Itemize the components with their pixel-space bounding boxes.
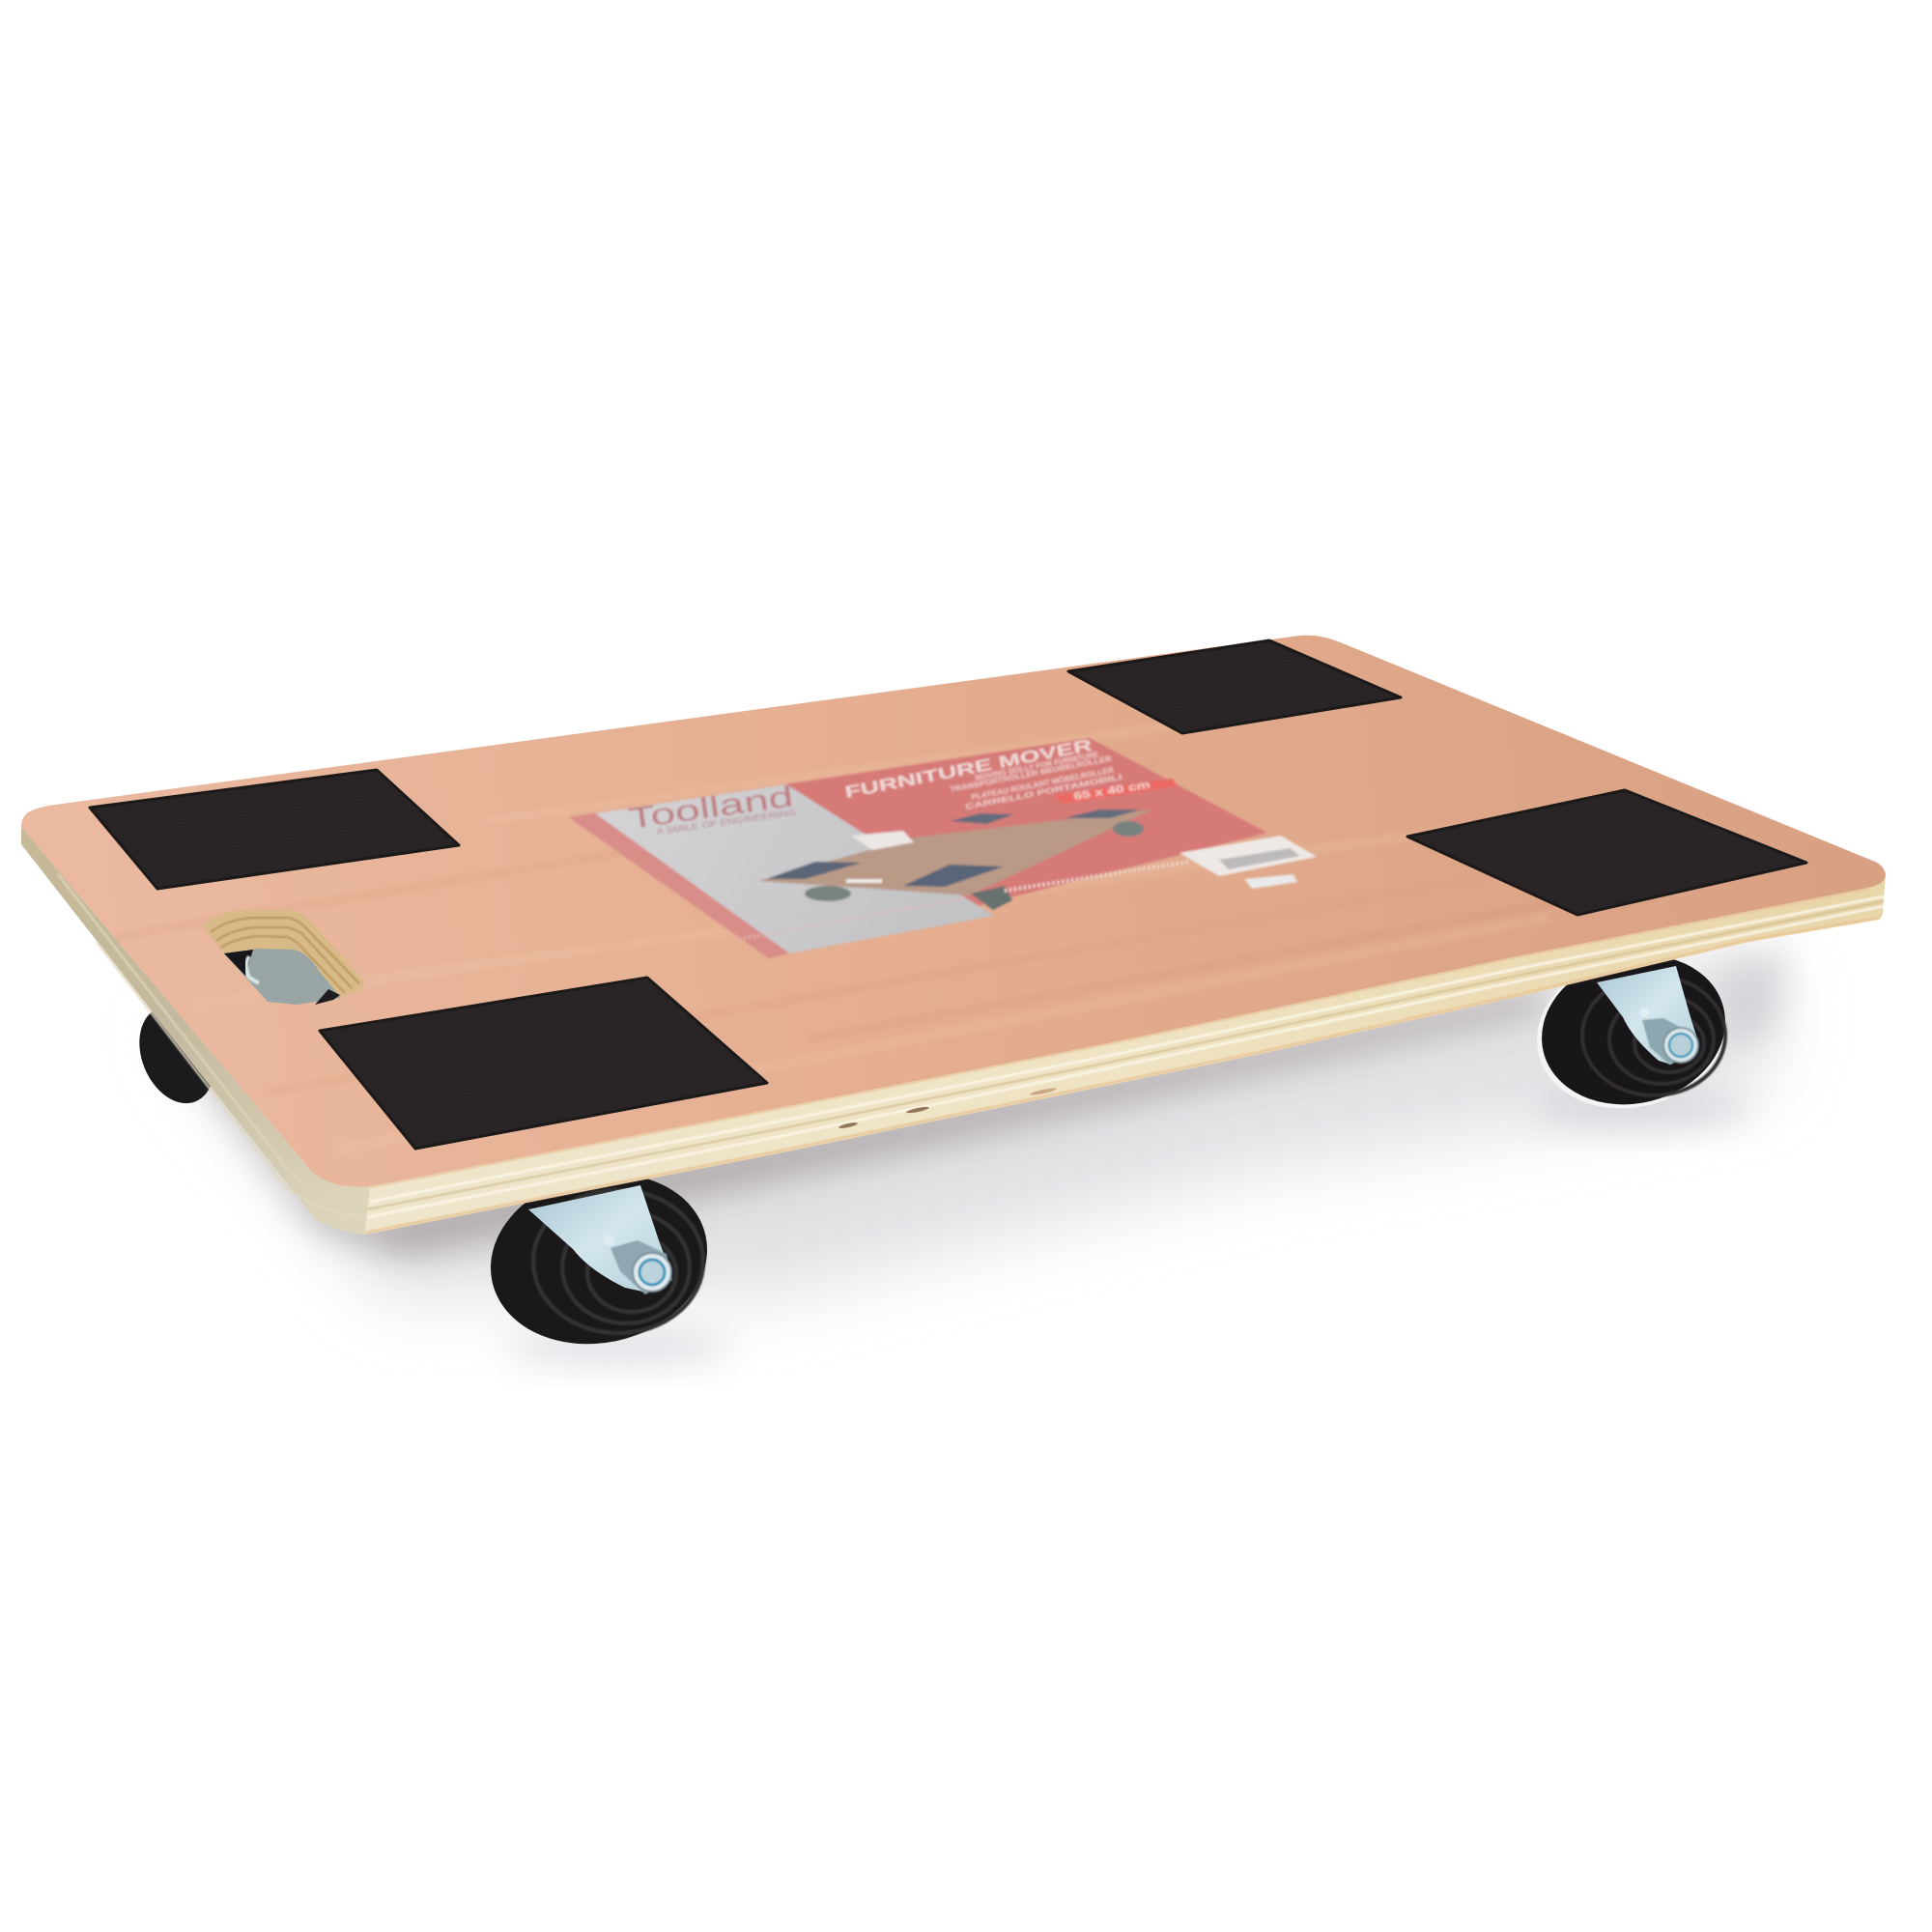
handle hole: [203, 910, 364, 1005]
label: product title: FURNITURE MOVER: [843, 736, 1094, 802]
label: brand tagline: A SMILE OF ENGINEERING: [656, 808, 797, 837]
front wheel bracket and bolt: [528, 1185, 672, 1294]
label: grey panel: [595, 784, 994, 953]
front wheel: [474, 1153, 724, 1364]
label: barcode sticker: [1179, 836, 1317, 876]
rubber pad: front left: [320, 978, 767, 1149]
label: brand name: Toolland: [626, 780, 795, 836]
product label sticker: [569, 736, 1317, 958]
back-left wheel: [126, 995, 228, 1115]
floor shadow: [145, 947, 1787, 1365]
top surface of board: [21, 636, 1886, 1187]
label: dotted measure line, left: [739, 898, 966, 939]
rubber pad: back left: [90, 770, 459, 889]
label: description lines: PLATEAU ROULANT MÖBELROLLER: [971, 765, 1115, 802]
label: description lines: TRANSPORTROLLER MEUBELROLLER: [950, 754, 1112, 794]
label: small price tag: [1244, 874, 1297, 889]
label: description lines: MOVING DOLLY FOR FURNITURE: [975, 750, 1100, 782]
label: description lines: CARRELLO PORTAMOBILI: [965, 773, 1122, 811]
rubber pad: front right: [1407, 790, 1806, 915]
label: size badge: [1053, 779, 1177, 804]
label: red background: [569, 738, 1267, 958]
plywood edge: [21, 827, 1886, 1235]
back-right wheel: [1520, 935, 1743, 1128]
label: dotted measure line, right: [1005, 862, 1188, 891]
rubber pad: back right: [1068, 640, 1401, 733]
label: description lines: [950, 750, 1122, 811]
label: mini dolly picture: [758, 810, 1151, 910]
label: size text: 65 x 40 cm: [1073, 780, 1151, 803]
label: pale spine strip: [569, 813, 789, 958]
plywood knots: [838, 1087, 1057, 1129]
